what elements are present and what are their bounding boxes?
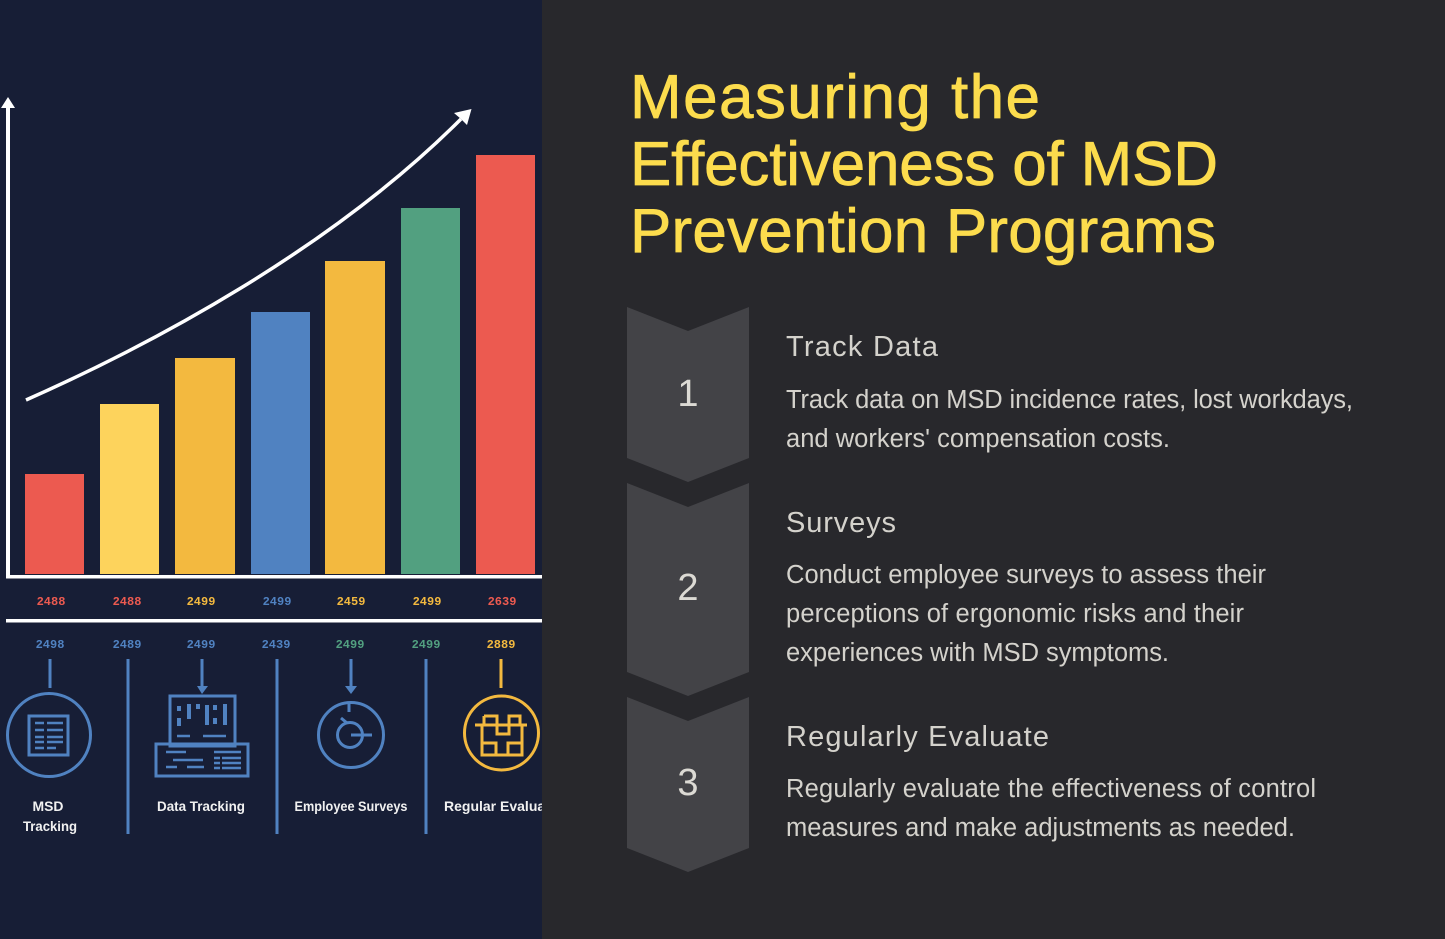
arrow: growth trend curve [26, 109, 472, 400]
icon labels: MSD [32, 798, 64, 814]
step 2 text: Conduct employee surveys to assess their [786, 561, 1266, 589]
icon: MSD tracking [8, 659, 90, 776]
step 1 text [786, 386, 1353, 453]
title: Prevention Programs [630, 197, 1216, 266]
icon: regular evaluation [464, 659, 538, 770]
step 2 [627, 483, 1266, 696]
step 2 text: experiences with MSD symptoms. [786, 639, 1169, 667]
chevron 2 [627, 483, 749, 696]
chart value labels: 2499 [263, 595, 291, 609]
title [630, 63, 1218, 266]
step 3 heading: Regularly Evaluate [786, 721, 1049, 753]
timeline value labels: 2499 [412, 638, 440, 652]
number 2: 2 [677, 567, 699, 609]
chart value labels: 2488 [113, 595, 141, 609]
step 1 text: Track data on MSD incidence rates, lost workdays, [786, 386, 1353, 414]
step 3 text: measures and make adjustments as needed. [786, 814, 1295, 842]
panel: chart illustration [0, 0, 571, 939]
chart value labels: 2459 [337, 595, 365, 609]
chart value labels: 2488 [37, 595, 65, 609]
icon labels: Tracking [23, 818, 77, 834]
icon labels: Data Tracking [157, 798, 245, 814]
title: Effectiveness of MSD [630, 130, 1218, 199]
timeline value labels: 2499 [336, 638, 364, 652]
bar chart [25, 155, 535, 574]
timeline value labels: 2439 [262, 638, 290, 652]
number 3: 3 [677, 762, 699, 804]
number 1: 1 [677, 373, 699, 415]
icon labels: Regular Evaluation [444, 798, 571, 814]
timeline value labels: 2489 [113, 638, 141, 652]
timeline value labels: 2889 [487, 638, 515, 652]
step 1 [627, 307, 1353, 482]
icon: employee surveys [318, 659, 384, 768]
icon labels: Employee Surveys [294, 798, 408, 814]
step 3 [627, 697, 1316, 872]
step 2 text [786, 561, 1266, 667]
title: Measuring the [630, 63, 1040, 132]
timeline value labels: 2498 [36, 638, 64, 652]
chart value labels [37, 595, 516, 609]
timeline value labels [36, 638, 515, 652]
timeline value labels: 2499 [187, 638, 215, 652]
chart value labels: 2499 [413, 595, 441, 609]
step 2 text: perceptions of ergonomic risks and their [786, 600, 1244, 628]
panel: content [542, 0, 1445, 939]
step 2 heading: Surveys [786, 507, 896, 539]
chart axes [1, 97, 542, 578]
chart value labels: 2499 [187, 595, 215, 609]
chevron 1 [627, 307, 749, 482]
step 1 text: and workers' compensation costs. [786, 425, 1170, 453]
step 3 text: Regularly evaluate the effectiveness of control [786, 775, 1316, 803]
step 3 text [786, 775, 1316, 842]
chevron 3 [627, 697, 749, 872]
chart value labels: 2639 [488, 595, 516, 609]
icon labels [23, 798, 571, 834]
icon: data tracking [156, 659, 248, 776]
step 1 heading: Track Data [786, 331, 939, 363]
